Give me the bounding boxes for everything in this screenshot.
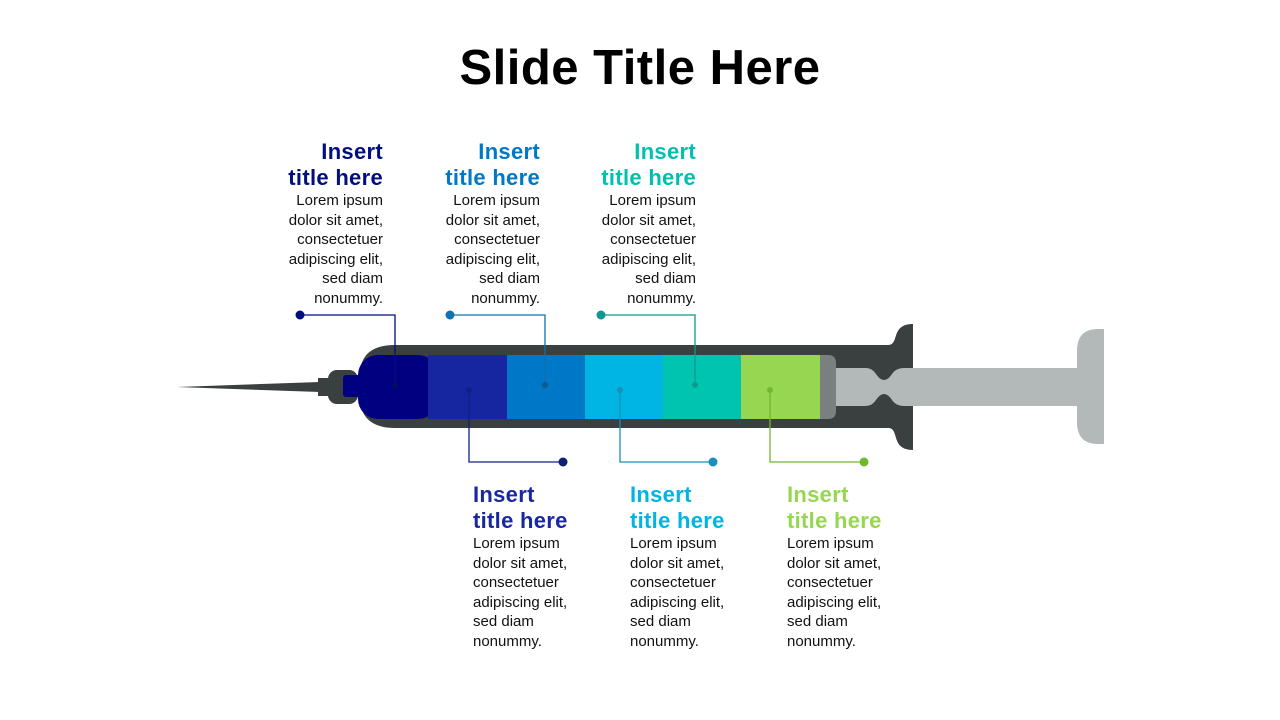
- text: item 1: title here: [288, 165, 383, 190]
- text: item 3: sed diam: [479, 270, 540, 287]
- text: item 6: title here: [787, 508, 882, 533]
- needle: [177, 382, 320, 392]
- plunger rubber: [820, 355, 836, 419]
- text: item 4: Lorem ipsum: [630, 535, 717, 552]
- text: item 3: title here: [445, 165, 540, 190]
- text: item 3: Lorem ipsum: [453, 192, 540, 209]
- text: item 1: consectetuer: [297, 231, 383, 248]
- text: item 2: nonummy.: [473, 632, 542, 650]
- text: item 6: Lorem ipsum: [787, 535, 874, 552]
- text: item 1: [288, 139, 383, 306]
- text: item 2: Insert: [473, 482, 535, 507]
- text: item 2: [473, 482, 568, 650]
- text: item 6: consectetuer: [787, 574, 873, 591]
- text: item 5: Insert: [634, 139, 696, 164]
- text: item 2: dolor sit amet,: [473, 554, 567, 572]
- text: item 6: [787, 482, 882, 650]
- text: item 6: dolor sit amet,: [787, 554, 881, 572]
- text: item 4: consectetuer: [630, 574, 716, 591]
- text: item 1: sed diam: [322, 270, 383, 287]
- text: item 1: Insert: [321, 139, 383, 164]
- text: item 5: adipiscing elit,: [602, 250, 696, 268]
- text: item 6: nonummy.: [787, 632, 856, 650]
- flange: [888, 324, 913, 450]
- text: item 3: dolor sit amet,: [446, 212, 540, 228]
- text: item 5: title here: [601, 165, 696, 190]
- text: item 4: sed diam: [630, 613, 691, 630]
- text: item 3: consectetuer: [454, 231, 540, 248]
- text: item 2: title here: [473, 508, 568, 533]
- text: item 1: adipiscing elit,: [289, 250, 383, 268]
- text: item 5: sed diam: [635, 270, 696, 287]
- text: item 4: [630, 482, 725, 650]
- text: item 3: adipiscing elit,: [446, 250, 540, 268]
- title: Slide Title Here: [459, 41, 821, 95]
- text: item 6: sed diam: [787, 613, 848, 630]
- text: item 4: Insert: [630, 482, 692, 507]
- text: item 2: sed diam: [473, 613, 534, 630]
- plunger rod: [836, 368, 1080, 406]
- text: item 2: adipiscing elit,: [473, 594, 567, 610]
- text: item 5: consectetuer: [610, 231, 696, 248]
- text: item 5: [601, 139, 696, 306]
- text: item 3: Insert: [478, 139, 540, 164]
- text: item 4: nonummy.: [630, 632, 699, 650]
- text: item 5: dolor sit amet,: [602, 212, 696, 228]
- text: item 1: nonummy.: [314, 290, 383, 306]
- text: item 2: Lorem ipsum: [473, 535, 560, 552]
- text: item 5: Lorem ipsum: [609, 192, 696, 209]
- text: item 3: [445, 139, 540, 306]
- barrel: [345, 345, 890, 428]
- text: item 1: dolor sit amet,: [289, 212, 383, 228]
- text: item 2: consectetuer: [473, 574, 559, 591]
- text: item 4: dolor sit amet,: [630, 554, 724, 572]
- text: item 3: nonummy.: [471, 290, 540, 306]
- text: item 6: Insert: [787, 482, 849, 507]
- text: item 4: adipiscing elit,: [630, 594, 724, 610]
- text: item 4: title here: [630, 508, 725, 533]
- text: item 5: nonummy.: [627, 290, 696, 306]
- connectors: [300, 315, 864, 462]
- text: item 1: Lorem ipsum: [296, 192, 383, 209]
- thumb pad: [1077, 329, 1104, 444]
- text: item 6: adipiscing elit,: [787, 594, 881, 610]
